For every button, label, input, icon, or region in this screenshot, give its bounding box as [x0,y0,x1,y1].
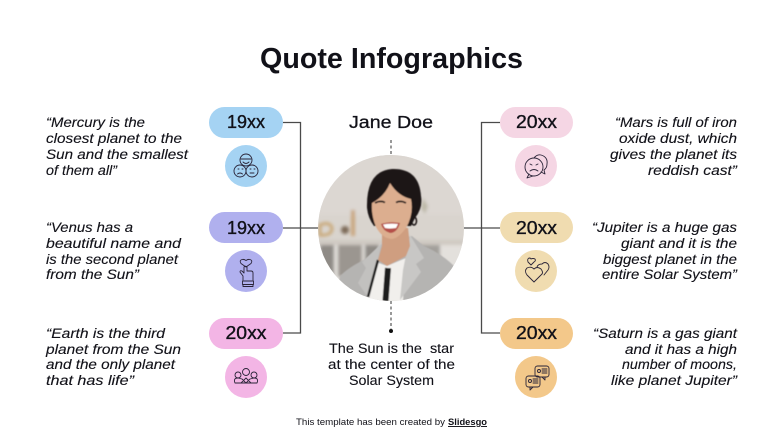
icon: hearts [515,250,557,292]
quote: Jupiter: biggest planet in the [603,252,737,267]
year pill 20xx pink: 20xx [226,323,266,343]
year pill 19xx blue: 19xx [227,112,265,132]
year pill 20xx pink [209,318,283,349]
quote: Mars [610,115,738,178]
year pill 19xx purple [209,212,283,243]
quote: Mars: gives the planet its [610,147,737,162]
year pill 20xx orange: 20xx [516,323,557,343]
right connector lines [463,122,500,333]
quote: Jupiter: entire Solar System” [602,267,738,282]
quote: Earth: that has life” [46,373,135,388]
year pill 19xx blue [209,107,283,138]
quote: Mercury: “Mercury is the [46,115,145,130]
mouth [381,222,400,233]
quote: Earth: “Earth is the third [46,326,166,341]
quote: Mars: reddish cast” [648,163,738,178]
face [372,183,412,239]
footer credit: This template has been created by [296,417,445,428]
quote: Mercury: closest planet to the [46,131,182,146]
quote: Venus: from the Sun” [46,267,140,282]
quote: Venus: is the second planet [46,252,179,267]
black trims [368,260,378,297]
center description [328,341,455,388]
year pill 20xx light pink: 20xx [516,112,557,132]
icon: group of people [225,356,267,398]
dashed line top [390,140,392,155]
left lapel [358,246,380,294]
quote: Venus: “Venus has a [46,220,134,235]
right lapel [400,235,424,300]
hair [367,169,421,226]
icon: three emoji faces [225,145,267,187]
year pill 20xx beige [500,212,573,243]
quote: Jupiter: “Jupiter is a huge gas [592,220,737,235]
center name: Jane Doe [349,112,433,132]
quote: Venus: beautiful name and [46,236,182,251]
quote: Saturn [593,326,738,388]
quote: Earth: planet from the Sun [45,342,181,357]
quote: Mercury [46,115,189,178]
quote: Saturn: like planet Jupiter” [611,373,738,388]
dashed line bottom with dot [389,301,393,333]
year pill 20xx light pink [500,107,573,138]
left connector lines [283,122,320,333]
quote: Saturn: and it has a high [625,342,737,357]
quote: Mercury: of them all” [46,163,118,178]
quote: Mars: oxide dust, which [619,131,737,146]
portrait photo [318,155,464,302]
quote: Earth [45,326,181,388]
eyes [375,201,385,203]
year pill 20xx beige: 20xx [516,218,557,238]
jacket [335,236,454,301]
center description: at the center of the [328,357,455,372]
footer credit: Slidesgo [448,417,487,428]
quote: Earth: and the only planet [46,357,176,372]
quote: Venus [46,220,182,282]
quote: Saturn: “Saturn is a gas giant [593,326,738,341]
earring [412,217,416,225]
icon: sad speech bubbles [515,145,557,187]
quote: Mercury: Sun and the smallest [46,147,189,162]
title: Quote Infographics [260,43,523,75]
center description: Solar System [349,373,434,388]
neck [378,228,410,266]
quote: Jupiter: giant and it is the [621,236,737,251]
quote: Saturn: number of moons, [622,357,737,372]
quote: Jupiter [592,220,738,282]
year pill 19xx purple: 19xx [227,218,265,238]
center description: The Sun is the star [329,341,455,356]
shirt [367,258,406,301]
icon: hand touching heart [225,250,267,292]
quote: Mars: “Mars is full of iron [615,115,737,130]
icon: chat messages [515,356,557,398]
year pill 20xx orange [500,318,573,349]
